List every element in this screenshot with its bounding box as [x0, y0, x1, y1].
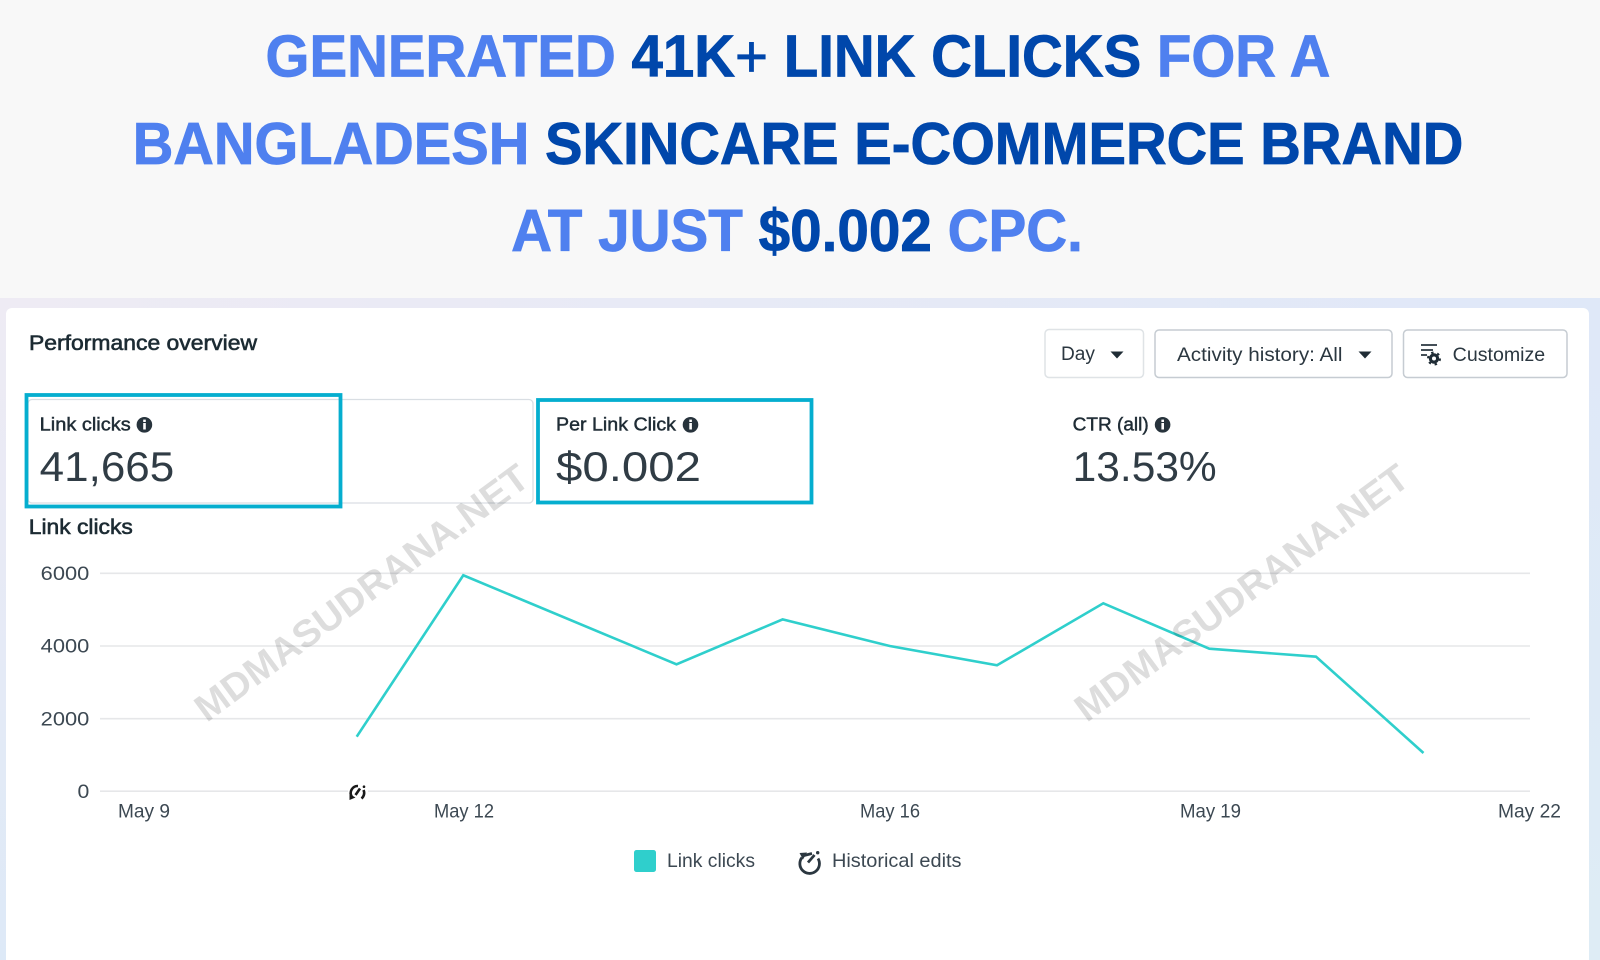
watermark: left: MDMASUDRANA.NET [187, 457, 537, 730]
button: day: Day [1061, 344, 1095, 365]
panel: performance overview [6, 308, 1589, 960]
line chart: link clicks [41, 563, 1561, 823]
title: GENERATED 41K+ LINK CLICKS FOR A [266, 25, 1330, 90]
metric: link clicks: 41,665 [40, 443, 174, 490]
button: activity history [1155, 330, 1392, 378]
icon: historical edits [800, 851, 819, 873]
icon: info [683, 417, 698, 433]
title: BANGLADESH SKINCARE E-COMMERCE BRAND [133, 112, 1463, 177]
y axis labels [41, 563, 89, 803]
x axis labels: May 12 [434, 801, 494, 823]
metric card outline [28, 400, 533, 503]
metric: link clicks [26, 395, 340, 506]
metric: per link click [538, 400, 812, 502]
button: customize [1404, 330, 1567, 378]
x axis labels: May 9 [118, 801, 170, 823]
legend swatch: link clicks [634, 850, 656, 872]
icon: info [1155, 417, 1170, 433]
data line [357, 575, 1424, 753]
legend [634, 850, 962, 873]
x axis labels: May 22 [1498, 801, 1561, 823]
title: AT JUST $0.002 CPC. [511, 199, 1083, 264]
x axis labels: May 16 [860, 801, 920, 823]
y axis labels: 4000 [41, 636, 89, 658]
watermark: right: MDMASUDRANA.NET [1067, 457, 1417, 730]
x axis labels [118, 801, 1561, 823]
legend: Historical edits [832, 850, 962, 872]
metric: link clicks: Link clicks [40, 415, 131, 435]
button: activity history: Activity history: All [1177, 345, 1342, 366]
page background [0, 298, 1600, 960]
metric: ctr: CTR (all) [1073, 415, 1149, 435]
icon: info [137, 417, 152, 433]
metric: per link click: $0.002 [556, 443, 701, 490]
heading: performance overview: Performance overview [29, 332, 258, 355]
highlight box: per link click [538, 400, 812, 502]
legend: Link clicks [667, 850, 755, 872]
metric: ctr [1073, 415, 1217, 490]
metric: ctr: 13.53% [1073, 443, 1217, 490]
y axis labels: 0 [78, 781, 89, 803]
icon: historical edit marker [348, 783, 368, 801]
metric: per link click: Per Link Click [556, 415, 677, 435]
heading: link clicks chart: Link clicks [29, 516, 133, 539]
header band [0, 0, 1600, 298]
y axis labels: 6000 [41, 563, 89, 585]
y axis labels: 2000 [41, 708, 89, 730]
button: day [1045, 330, 1144, 378]
icon: customize sliders and gear [1421, 345, 1440, 364]
title [133, 25, 1463, 264]
button: customize: Customize [1453, 345, 1545, 366]
x axis labels: May 19 [1180, 801, 1241, 823]
highlight box: link clicks [26, 395, 340, 506]
